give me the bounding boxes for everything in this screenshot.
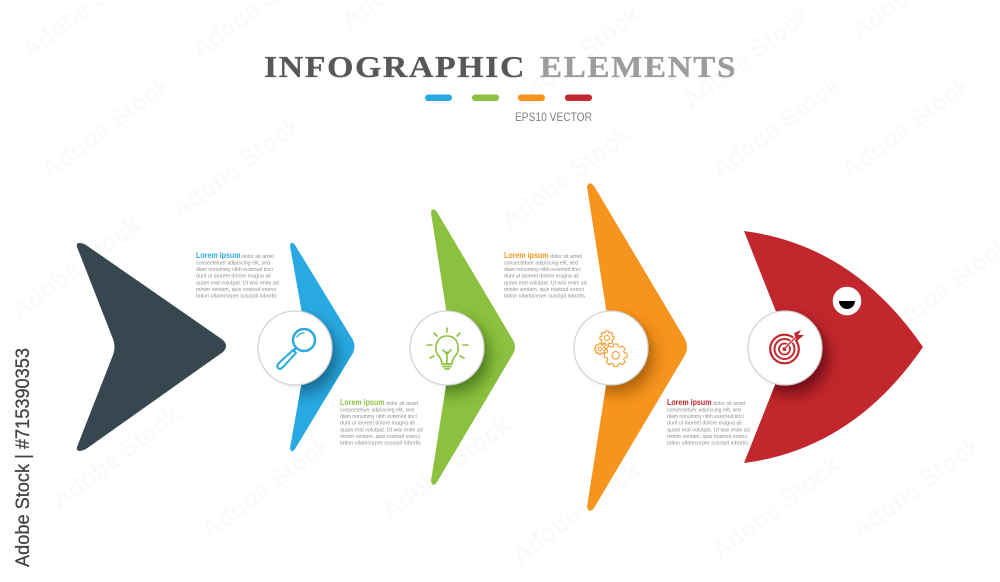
text block: red: quam erat volutpat. Ut wisi enim ad bbox=[667, 427, 750, 433]
text block: blue: minim veniam, quis nostrud exerci bbox=[196, 287, 276, 293]
watermark: Adobe Stock bbox=[847, 430, 986, 545]
text block: orange: consectetuer adipiscing elit, sed bbox=[504, 260, 578, 266]
text block: blue: quam erat volutpat. Ut wisi enim ad bbox=[196, 280, 279, 286]
text block: green: consectetuer adipiscing elit, sed bbox=[340, 407, 414, 413]
subtitle: EPS10 VECTOR bbox=[515, 110, 592, 124]
watermark: Adobe Stock bbox=[677, 0, 816, 115]
watermark: Adobe Stock bbox=[37, 70, 176, 185]
text block: red: dolor sit amet bbox=[713, 401, 745, 407]
text block: green: quam erat volutpat. Ut wisi enim ad bbox=[340, 427, 423, 433]
text block: green: dunt ut laoreet dolore magna ali bbox=[340, 421, 415, 427]
watermark: Adobe Stock bbox=[7, 210, 146, 325]
icon: magnifier bbox=[277, 329, 315, 369]
watermark: Adobe Stock bbox=[837, 70, 976, 185]
text block: orange: dolor sit amet bbox=[550, 254, 582, 260]
text block: red: dunt ut laoreet dolore magna ali bbox=[667, 421, 742, 427]
circle: magnifier bbox=[258, 311, 335, 388]
watermark: Adobe Stock bbox=[707, 70, 846, 185]
text block: orange: Lorem ipsum bbox=[504, 250, 549, 260]
text block: blue: Lorem ipsum bbox=[196, 250, 241, 260]
text block: orange: diam nonummy nibh euismod tinci bbox=[504, 267, 581, 273]
text block: red: consectetuer adipiscing elit, sed bbox=[667, 407, 741, 413]
text block: orange: tation ullamcorper suscipit lobortis bbox=[504, 294, 585, 300]
text block: blue bbox=[196, 250, 279, 300]
circle: gears bbox=[574, 311, 651, 388]
text block: green: tation ullamcorper suscipit lobortis bbox=[340, 441, 421, 447]
text block: red: Lorem ipsum bbox=[667, 397, 712, 407]
text block: blue: tation ullamcorper suscipit lobortis bbox=[196, 294, 277, 300]
watermark: Adobe Stock bbox=[377, 410, 516, 525]
text block: blue: dolor sit amet bbox=[242, 254, 274, 260]
text block: red: minim veniam, quis nostrud exerci bbox=[667, 434, 747, 440]
text block: blue: dunt ut laoreet dolore magna ali bbox=[196, 274, 271, 280]
watermark: Adobe Stock bbox=[167, 110, 306, 225]
text block: red: diam nonummy nibh euismod tinci bbox=[667, 414, 744, 420]
arrow: orange bbox=[579, 183, 687, 511]
text block: green: Lorem ipsum bbox=[340, 397, 385, 407]
watermark: Adobe Stock bbox=[47, 400, 186, 515]
circle: target bbox=[748, 311, 825, 388]
watermark: Adobe Stock bbox=[707, 450, 846, 565]
text block: green: dolor sit amet bbox=[386, 401, 418, 407]
stock credit: Adobe Stock | #715390353 bbox=[13, 348, 34, 567]
title: ELEMENTS bbox=[540, 49, 737, 84]
text block: orange: minim veniam, quis nostrud exerci bbox=[504, 287, 584, 293]
watermark: Adobe Stock bbox=[507, 455, 646, 570]
text block: green bbox=[340, 397, 423, 447]
circle: light bulb bbox=[410, 311, 487, 388]
arrow: dark bbox=[77, 243, 226, 451]
text block: orange: quam erat volutpat. Ut wisi enim ad bbox=[504, 280, 587, 286]
fish eye bbox=[833, 287, 861, 315]
arrow: blue bbox=[290, 242, 354, 452]
title bbox=[264, 49, 737, 84]
watermark: Adobe Stock bbox=[507, 0, 646, 115]
text block: blue: consectetuer adipiscing elit, sed bbox=[196, 260, 270, 266]
watermark: Adobe Stock bbox=[197, 430, 336, 545]
text block: red: tation ullamcorper suscipit lobortis bbox=[667, 441, 748, 447]
text block: orange: dunt ut laoreet dolore magna ali bbox=[504, 274, 579, 280]
text block: green: minim veniam, quis nostrud exerci bbox=[340, 434, 420, 440]
arrow: green bbox=[431, 209, 515, 485]
icon: target bbox=[770, 330, 804, 363]
colour pills bbox=[425, 94, 592, 101]
icon: light bulb bbox=[427, 328, 468, 369]
text block: blue: diam nonummy nibh euismod tinci bbox=[196, 267, 273, 273]
arrow: red fish bbox=[744, 231, 923, 463]
watermark: Adobe Stock bbox=[497, 120, 636, 235]
text block: orange bbox=[504, 250, 587, 300]
title: INFOGRAPHIC bbox=[264, 49, 526, 84]
text block: red bbox=[667, 397, 750, 447]
text block: green: diam nonummy nibh euismod tinci bbox=[340, 414, 417, 420]
icon: gears bbox=[595, 331, 627, 367]
